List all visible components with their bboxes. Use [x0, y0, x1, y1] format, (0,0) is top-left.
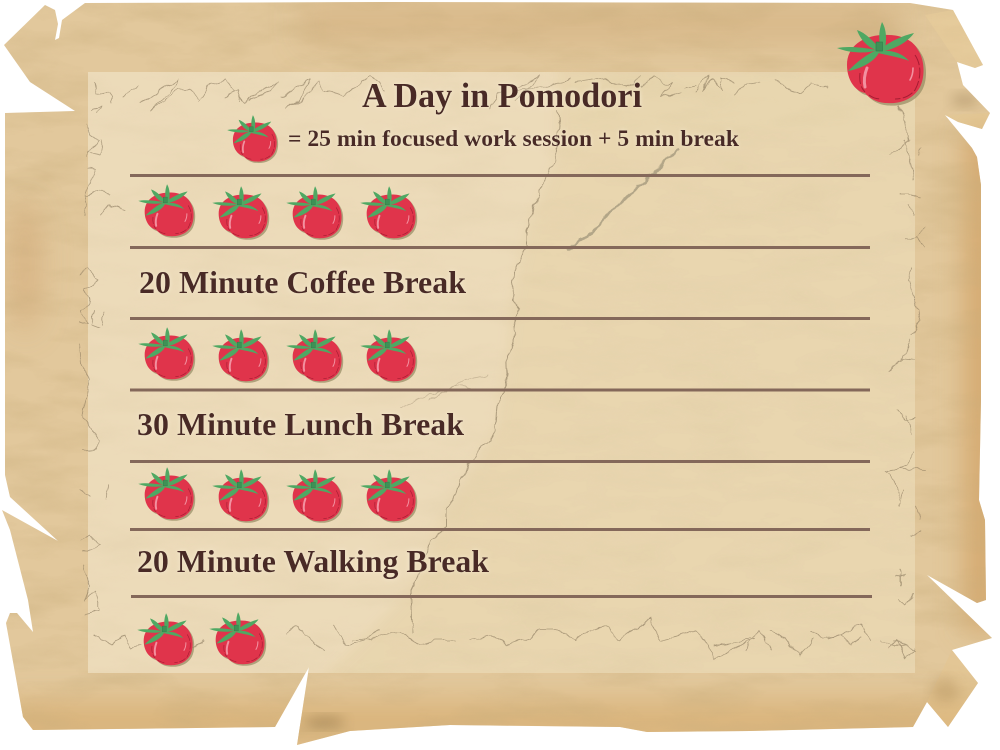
row 2: four pomodoros: [138, 327, 417, 383]
paper right of the crack: [334, 72, 915, 673]
title: A Day in Pomodori: [362, 76, 642, 115]
legend text: = 25 min focused work session + 5 min break: [288, 126, 739, 151]
heading: walking break: 20 Minute Walking Break: [137, 543, 489, 579]
heading: lunch break: 30 Minute Lunch Break: [137, 406, 464, 442]
parchment scribble border and crack: [80, 75, 925, 660]
heading: coffee break: 20 Minute Coffee Break: [139, 264, 466, 300]
row divider lines: [130, 174, 872, 598]
row 4: two pomodoros: [137, 612, 266, 667]
lighter inner panel: [88, 72, 915, 673]
icon: large corner tomato: [837, 22, 926, 106]
icon: legend tomato: [227, 115, 278, 163]
row 3: four pomodoros: [138, 467, 417, 523]
folded torn flaps: [305, 10, 990, 728]
row 1: four pomodoros: [138, 184, 417, 240]
